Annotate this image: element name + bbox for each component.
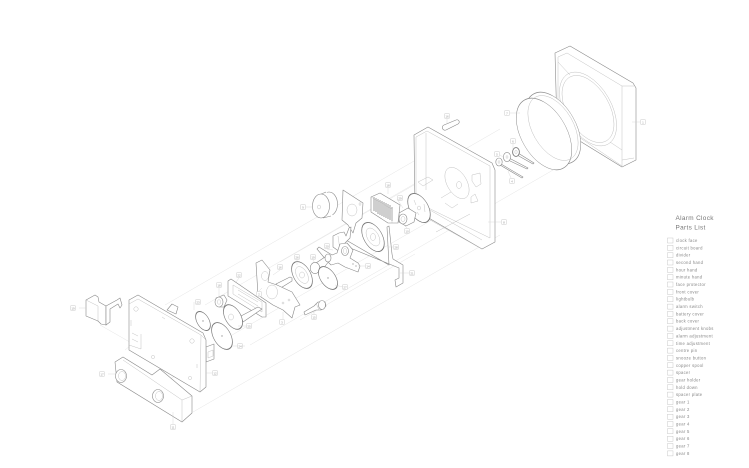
- item 7: face protector: [676, 282, 706, 287]
- label 31: [444, 114, 450, 118]
- label 25: [502, 220, 506, 224]
- explosion guide lines: [100, 108, 593, 412]
- gear 7: [318, 262, 338, 294]
- label 23: [386, 182, 390, 188]
- label 24: [300, 204, 306, 210]
- label 30: [640, 120, 646, 124]
- label 20: 28: [394, 245, 398, 249]
- item 3: divider: [676, 253, 691, 258]
- label 3: [170, 424, 176, 430]
- label 28: [510, 138, 516, 144]
- label 19: [410, 270, 414, 276]
- item 12: back cover: [676, 319, 700, 324]
- label 29: [504, 110, 510, 116]
- label 29: 7: [506, 111, 508, 115]
- label 16: [324, 244, 330, 248]
- label 8: 18: [217, 283, 221, 287]
- label 16: 20: [325, 244, 329, 248]
- item 19: [668, 370, 691, 375]
- front cover case: [414, 127, 495, 249]
- item 6: minute hand: [676, 275, 703, 280]
- label 12: 2: [258, 292, 260, 296]
- alarm adjustment piece: [317, 243, 360, 272]
- gear 2: [212, 318, 232, 354]
- item 28: gear 6: [676, 436, 690, 441]
- label 9: [236, 272, 242, 278]
- label 1: 19: [71, 306, 75, 310]
- item 17: snooze button: [676, 355, 707, 360]
- item 22: spacer plate: [676, 392, 703, 397]
- item 27: [668, 429, 690, 434]
- label 22: 29: [398, 196, 402, 200]
- label 21: 10: [405, 229, 409, 233]
- item 29: gear 7: [676, 444, 690, 448]
- gear with hub: [362, 218, 384, 256]
- label 25: 8: [503, 220, 505, 224]
- item 20: gear holder: [676, 378, 701, 382]
- label 3: 11: [171, 425, 175, 429]
- shaft pin: [276, 277, 292, 289]
- label 15: [310, 254, 316, 260]
- label 27: [494, 152, 500, 156]
- item 8: front cover: [676, 289, 699, 294]
- icon: hour hand: [503, 152, 528, 169]
- item 26: [668, 422, 690, 426]
- time adjustment knob: [304, 300, 326, 315]
- icon: alarm button: [152, 390, 164, 402]
- label 7: [196, 300, 200, 304]
- label 21: [404, 228, 410, 234]
- label 5: 24: [238, 344, 242, 348]
- clock hands: [496, 148, 534, 178]
- item 23: gear 1: [676, 400, 690, 404]
- label 27: 5: [496, 152, 498, 156]
- label 14: 26: [295, 255, 299, 259]
- label 13: 16: [278, 265, 282, 269]
- label 19: 21: [410, 271, 414, 275]
- parts list title: Alarm Clock: [676, 215, 714, 222]
- icon: snooze button: [116, 370, 126, 382]
- snooze bar: [115, 357, 192, 422]
- spacer: [310, 254, 331, 274]
- label 13: [278, 264, 282, 270]
- label 12: [256, 292, 262, 296]
- face protector ring: [516, 80, 581, 182]
- callout labels: [70, 110, 646, 430]
- alarm switch: [399, 208, 416, 226]
- item 26: gear 4: [676, 422, 690, 426]
- label 26: [510, 178, 514, 184]
- item 11: battery cover: [676, 311, 704, 316]
- item 9: lightbulb: [676, 297, 695, 302]
- label 7: 23: [196, 300, 200, 304]
- item 29: [668, 444, 690, 448]
- label 1: [70, 306, 76, 310]
- label 4: [212, 370, 218, 376]
- item 25: gear 3: [676, 414, 690, 419]
- item 25: [668, 414, 690, 419]
- label 6: [246, 324, 252, 328]
- gear with notches: [408, 188, 430, 228]
- label 14: [294, 254, 300, 260]
- label 17: [342, 284, 348, 290]
- icon: second hand: [496, 158, 523, 178]
- label 17: 27: [343, 285, 347, 289]
- icon: minute hand: [513, 148, 534, 164]
- back cover: [129, 295, 214, 392]
- gear holder bracket: [343, 226, 403, 287]
- item 23: [668, 400, 690, 404]
- spacer plate: [228, 279, 266, 317]
- item 9: [668, 297, 695, 302]
- item 27: gear 5: [676, 429, 690, 434]
- item 2: circuit board: [676, 245, 703, 250]
- item 30: gear 8: [676, 451, 690, 456]
- item 18: copper spool: [676, 363, 704, 368]
- label 28: 6: [512, 139, 514, 143]
- item 4: second hand: [676, 260, 704, 265]
- label 22: [398, 196, 402, 200]
- parts list title: Parts List: [676, 224, 706, 232]
- label 26: 4: [511, 179, 513, 183]
- clock face: [555, 46, 636, 167]
- lightbulb cylinder: [312, 192, 338, 218]
- label 18: [366, 264, 370, 268]
- battery coil: [371, 193, 400, 223]
- label 10: [280, 320, 284, 324]
- gear 1: [196, 308, 210, 334]
- item 14: alarm adjustment: [676, 333, 713, 338]
- hold down tabs: [333, 227, 351, 252]
- item 1: clock face: [676, 238, 698, 243]
- label 31: 16: [445, 114, 449, 118]
- item 13: adjustment knobs: [676, 326, 714, 331]
- label 20: [394, 244, 398, 250]
- label 24: 9: [302, 205, 304, 209]
- item 30: [668, 451, 690, 456]
- centre pin: [442, 120, 459, 130]
- label 6: 25: [247, 324, 251, 328]
- label 15: 19: [311, 255, 315, 259]
- item 21: hold down: [676, 385, 698, 390]
- item 3: [668, 253, 691, 258]
- item 24: gear 2: [676, 407, 690, 412]
- label 5: [238, 344, 242, 348]
- item 10: alarm switch: [676, 304, 703, 309]
- item 28: [668, 436, 690, 441]
- gear 6: [292, 257, 312, 293]
- item 19: spacer: [676, 370, 691, 375]
- label 10: 3: [281, 320, 283, 324]
- label 2: 17: [100, 372, 104, 376]
- copper spool: [215, 295, 227, 307]
- parts list legend: [668, 238, 714, 456]
- label 2: [100, 372, 104, 376]
- item 16: centre pin: [676, 348, 698, 353]
- label 8: [216, 282, 222, 288]
- gear 3: [223, 300, 262, 334]
- label 11: 15: [312, 315, 316, 319]
- label 30: 1: [642, 120, 644, 124]
- label 23: 18: [386, 183, 390, 187]
- label 4: 12: [213, 371, 217, 375]
- item 24: [668, 407, 690, 412]
- item 15: time adjustment: [676, 341, 711, 346]
- label 9: 22: [237, 273, 241, 277]
- label 18: 14: [366, 264, 370, 268]
- divider plate: [256, 260, 300, 318]
- alarm button clip: [86, 295, 122, 325]
- label 11: [312, 314, 316, 320]
- circuit board: [342, 190, 363, 233]
- item 5: hour hand: [676, 267, 698, 272]
